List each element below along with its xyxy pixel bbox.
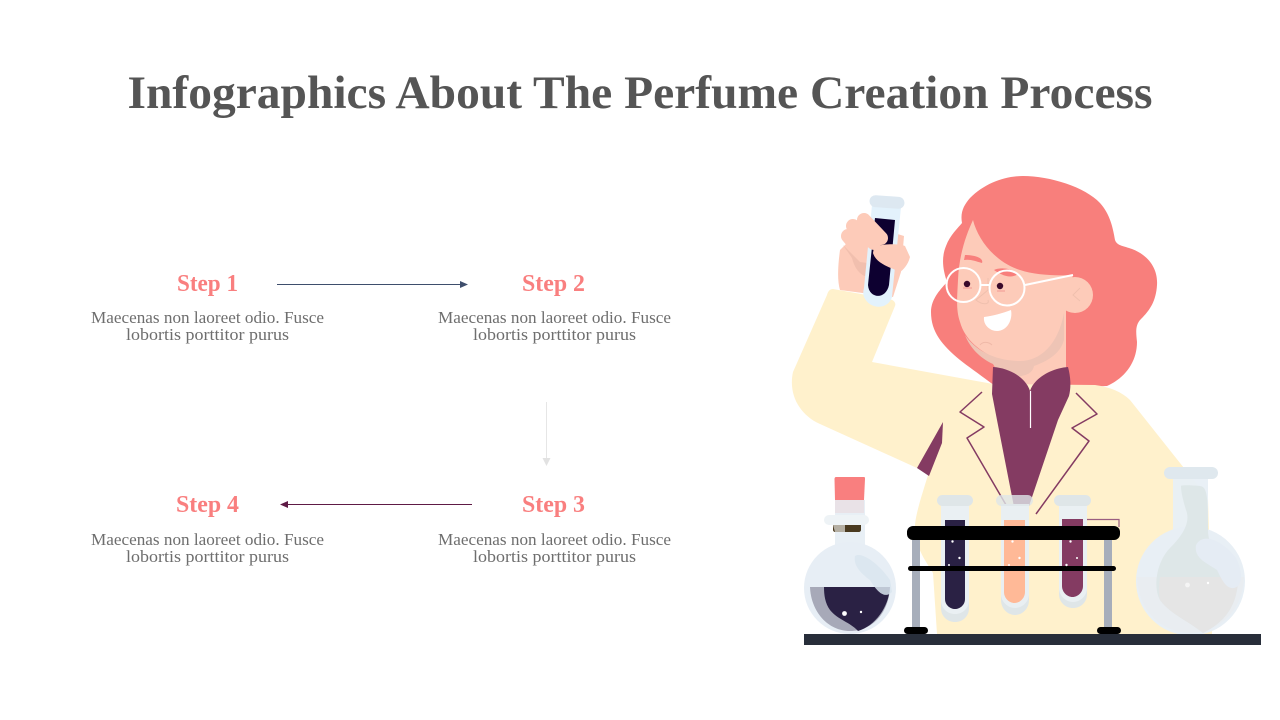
bubbles [948, 540, 1078, 566]
step 1 heading: Step 1 [177, 271, 238, 297]
cheeks [963, 288, 1005, 291]
smile [984, 310, 1011, 331]
step 2 text [438, 308, 671, 344]
step 4 text: Maecenas non laoreet odio. Fusce [91, 530, 324, 549]
hand shadow [843, 245, 874, 277]
title: Infographics About The Perfume Creation Process [128, 67, 1152, 119]
illustration: perfumer in the lab [792, 176, 1261, 645]
step 4 text [91, 530, 324, 566]
step 3 text [438, 530, 671, 566]
arrow: step 2 to step 3 [542, 402, 550, 466]
step 1 text [91, 308, 324, 344]
raised hand back [838, 228, 904, 297]
shirt collar [992, 367, 1070, 515]
thumb [873, 244, 910, 272]
step 3 heading: Step 3 [522, 492, 585, 518]
step 3 [438, 492, 671, 566]
shirt centre line [1030, 391, 1032, 428]
ear [1057, 277, 1093, 313]
left flask [804, 477, 896, 634]
neck and face [957, 220, 1073, 396]
step 4 [91, 492, 324, 566]
step 2 text: Maecenas non laoreet odio. Fusce [438, 308, 671, 327]
orange tube [996, 495, 1033, 615]
chin mark [980, 342, 992, 345]
fingers [848, 220, 881, 248]
test tube rack: back legs and feet [912, 540, 1112, 628]
step 1 text: lobortis porttitor purus [126, 325, 289, 344]
glasses [946, 268, 1073, 306]
step 4 heading: Step 4 [176, 492, 239, 518]
lab coat [792, 289, 1212, 634]
eyebrows [964, 255, 1018, 277]
rack bars [904, 526, 1121, 634]
purple tube [1054, 495, 1119, 608]
neck shadow [965, 313, 1064, 377]
lapels [960, 392, 1097, 514]
arrow: step 1 to step 2 [277, 281, 468, 288]
step 4 text: lobortis porttitor purus [126, 547, 289, 566]
step 3 text: lobortis porttitor purus [473, 547, 636, 566]
hair [931, 176, 1157, 390]
step 3 text: Maecenas non laoreet odio. Fusce [438, 530, 671, 549]
right flask [1136, 467, 1245, 636]
step 2 text: lobortis porttitor purus [473, 325, 636, 344]
step 1 text: Maecenas non laoreet odio. Fusce [91, 308, 324, 327]
step 2 heading: Step 2 [522, 271, 585, 297]
table top [804, 634, 1261, 645]
step 2 [438, 271, 671, 344]
nose [976, 278, 988, 304]
eyes [964, 281, 1003, 289]
test tube in hand [863, 195, 905, 307]
step 1 [91, 271, 324, 344]
coat fold [917, 422, 943, 476]
dark tube [937, 495, 973, 622]
arrow: step 3 to step 4 [280, 501, 472, 508]
